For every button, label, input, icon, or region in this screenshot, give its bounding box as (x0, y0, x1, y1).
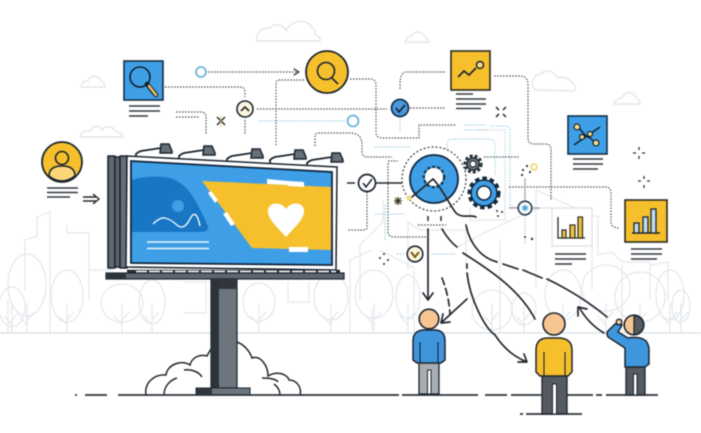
billboard screen (131, 161, 332, 265)
icon: check circle (347, 174, 402, 192)
icon: yellow bar chart square (625, 200, 667, 242)
arrow: dashed curve from right person (466, 225, 607, 317)
icon: small dark gear (465, 156, 481, 172)
icon: large blue gear (470, 178, 498, 208)
icon: central target gear (402, 147, 476, 217)
icon: cross mark (217, 115, 225, 127)
screen yellow banner (202, 181, 331, 250)
icon: white bar chart (552, 208, 592, 246)
yellow ring node (531, 164, 537, 170)
billboard side posts (108, 156, 127, 268)
icon: caret-down circle (407, 246, 423, 262)
magnifier text lines (129, 106, 160, 116)
arrow: dashed to left person (442, 278, 450, 314)
blue ring node middle (348, 116, 358, 126)
billboard lamps (136, 144, 343, 166)
white bar chart text lines (555, 254, 586, 264)
short dashes under target (428, 216, 441, 221)
person: left (413, 309, 445, 394)
trend text lines (456, 94, 486, 108)
billboard frame (126, 156, 337, 270)
icon: blue ring node (196, 67, 206, 77)
icon: magnifier square (124, 61, 163, 100)
yellow spark and asterisk (394, 196, 412, 205)
icon: search circle (306, 51, 348, 93)
arrow: down to left person (423, 229, 433, 300)
arrow: right person to trees (578, 307, 604, 333)
background trees (0, 254, 690, 330)
screen text lines (147, 242, 209, 248)
clouds (80, 21, 640, 137)
billboard pole (196, 279, 250, 395)
sparkle marks (633, 147, 650, 188)
icon: check badge blue (392, 100, 408, 116)
icon: scatter chart square (568, 116, 607, 154)
ground lines (75, 395, 658, 414)
user text lines (47, 188, 78, 197)
icon: blue target node (509, 178, 540, 215)
screen tape marks (208, 179, 308, 252)
icon: trend chart square (451, 51, 490, 90)
arrow: curve to middle person body (467, 264, 527, 362)
billboard ledge (106, 272, 344, 279)
yellow chart text lines (631, 249, 662, 259)
screen dark blue shape (132, 177, 208, 232)
screen sun and wave (153, 200, 200, 227)
arrow: to left person head (441, 299, 467, 323)
person: middle (536, 313, 572, 414)
small cross marks (496, 107, 506, 117)
person: right (607, 315, 649, 395)
arrow: curve to middle person shoulder (442, 229, 535, 319)
icon: user circle (42, 142, 82, 182)
scatter text lines (573, 159, 603, 169)
icon: caret circle (237, 101, 253, 117)
network dotted connectors (165, 69, 620, 254)
billboard (106, 144, 344, 279)
small dot clusters (379, 165, 533, 265)
background city skyline (8, 130, 668, 333)
bush behind pole (146, 342, 300, 395)
screen heart (268, 203, 304, 237)
arrow: double arrow to billboard (83, 194, 99, 204)
